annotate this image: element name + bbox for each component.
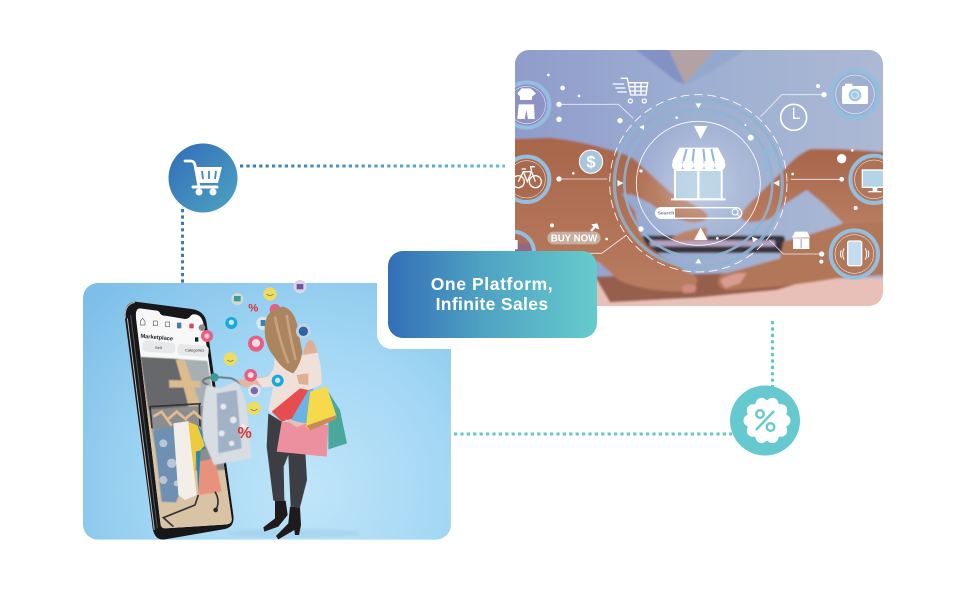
right hand — [740, 149, 887, 223]
clothes rack — [149, 404, 218, 527]
callout: one platform, infinite sales: Infinite Sales — [436, 294, 548, 314]
icons behind shopper — [256, 304, 280, 330]
dotted connector: cart to photo — [182, 166, 505, 284]
ring icon: clothes — [515, 80, 552, 130]
forearm and hand — [237, 377, 273, 387]
ring icon: monitor — [848, 154, 883, 205]
panel: shopper with smartphone — [83, 280, 455, 540]
connector lines and nodes — [562, 94, 840, 254]
bag: yellow — [306, 387, 337, 431]
callout: one platform, infinite sales: One Platform, — [431, 274, 553, 294]
callout: one platform, infinite sales — [388, 251, 597, 338]
icon: shopping cart badge — [168, 144, 238, 212]
panel: e-commerce hands photo — [515, 50, 883, 306]
ring icon: camera — [831, 71, 879, 118]
boots — [263, 501, 288, 532]
floating social icons: % — [248, 302, 258, 314]
left hand — [510, 138, 707, 292]
bag: teal zigzag — [328, 392, 347, 449]
phone app header: Categories — [185, 348, 204, 353]
infographic canvas — [83, 50, 883, 540]
icon: small shop — [792, 232, 810, 249]
bag: red — [272, 388, 308, 422]
bag: pink — [277, 422, 328, 457]
phone app header — [140, 318, 209, 357]
sweater — [256, 353, 322, 413]
store interior photo — [140, 357, 235, 530]
ring icon: smartphone — [831, 230, 878, 278]
floor shadow — [227, 529, 360, 538]
icon: shopping cart outline — [613, 78, 648, 103]
hair — [265, 307, 302, 373]
phone in hands — [642, 236, 785, 253]
phone app header: Marketplace — [140, 334, 173, 343]
icon: dollar coin — [579, 150, 603, 173]
icon: percent badge — [730, 386, 800, 456]
dotted connector: percent badge — [454, 321, 772, 434]
button: buy now — [547, 223, 601, 244]
shopper — [237, 307, 347, 539]
search bar: Search — [658, 211, 674, 217]
search bar — [656, 208, 742, 218]
jeans — [267, 413, 307, 507]
hanging lace top — [202, 377, 252, 465]
ring icon: partial bottom-left — [515, 230, 536, 251]
notch cut-out — [377, 280, 455, 349]
bag: beige base — [285, 419, 307, 427]
central glow — [638, 132, 754, 240]
floating social icons: % — [238, 425, 252, 442]
bag: blue — [291, 388, 313, 423]
phone screen — [136, 308, 232, 528]
ring markers — [617, 103, 779, 263]
ring icon: bicycle — [515, 154, 552, 204]
floating social icons — [201, 280, 311, 442]
smartphone — [125, 302, 237, 540]
button: buy now: BUY NOW — [551, 233, 598, 244]
icon: clock — [781, 104, 807, 130]
phone app header: Sell — [155, 345, 162, 350]
hanging clothes — [153, 426, 180, 503]
icon: storefront — [671, 148, 726, 200]
photo background: shirt, table and hands — [510, 45, 887, 308]
icon: dollar coin: $ — [586, 153, 596, 172]
bare shoulder — [303, 340, 317, 355]
dark shadow under hands — [597, 272, 794, 304]
sky background — [83, 283, 451, 540]
tech rings — [610, 95, 787, 272]
